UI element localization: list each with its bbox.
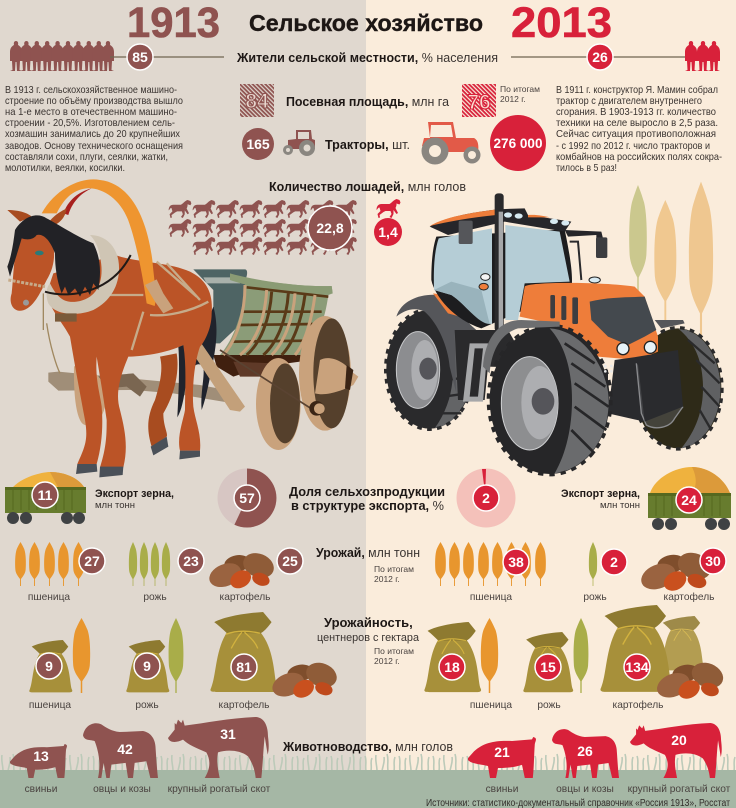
grain export 1913 xyxy=(5,472,174,524)
badge 22,8: 22,8 xyxy=(316,220,344,236)
badge 24: 24 xyxy=(681,492,697,508)
text 1913 xyxy=(5,84,183,174)
right background 2013 xyxy=(366,0,736,808)
rural population row xyxy=(10,41,720,71)
badge 30: 30 xyxy=(705,553,721,569)
people 1913 xyxy=(10,41,114,71)
far hind leg xyxy=(148,353,178,447)
badge 276 000 xyxy=(490,115,546,171)
cow: 31 xyxy=(220,726,236,742)
badge 23 xyxy=(178,548,204,574)
illustration: horse and cart xyxy=(7,179,358,477)
labels: рожь xyxy=(583,592,607,603)
hatched 76: 76 xyxy=(467,91,491,114)
text 1913: хозмашин занимались до 20 крупнейших xyxy=(5,128,181,140)
hatched 76 xyxy=(462,84,496,117)
rye xyxy=(589,542,597,586)
badge 85 xyxy=(127,44,153,70)
badge 38 xyxy=(503,549,529,575)
badge 11 xyxy=(32,482,58,508)
badge 2 xyxy=(601,549,627,575)
duga arc xyxy=(42,179,156,306)
hood xyxy=(520,283,658,360)
livestock 1913 xyxy=(10,717,271,795)
label xyxy=(561,488,640,511)
note 2012 xyxy=(500,84,540,104)
livestock heading: Животноводство, млн голов xyxy=(282,739,453,754)
left background 1913 xyxy=(0,0,366,808)
sheep: 26 xyxy=(577,743,593,759)
text 2013: трактор с двигателем внутреннего xyxy=(556,95,702,107)
pig: 13 xyxy=(33,748,49,764)
cow xyxy=(630,723,722,778)
yield heading: По итогам xyxy=(374,646,414,656)
tractors row xyxy=(242,115,546,171)
badge 25 xyxy=(277,548,303,574)
text 2013: - с 1992 по 2012 г. число тракторов и xyxy=(556,140,710,152)
cart xyxy=(48,269,358,450)
hatched 84 xyxy=(240,84,274,117)
badge 23: 23 xyxy=(183,553,199,569)
yield 2013 xyxy=(424,605,727,711)
label xyxy=(95,488,174,511)
labels: рожь xyxy=(537,700,561,711)
labels: пшеница xyxy=(470,592,512,603)
text 2013: техники на селе выросло в 2,5 раза. xyxy=(556,117,718,129)
labels xyxy=(29,699,269,711)
labels: картофель xyxy=(219,699,269,711)
shaft xyxy=(147,283,245,412)
export share pie 2013 xyxy=(456,468,516,528)
wagon xyxy=(5,472,86,524)
label: млн тонн xyxy=(95,500,135,511)
people 2013 xyxy=(685,41,720,71)
badge 27 xyxy=(79,548,105,574)
export share pie 1913 xyxy=(218,468,276,528)
title: Сельское хозяйство xyxy=(249,10,483,36)
note 2012: По итогам xyxy=(500,84,540,94)
labels: крупный рогатый скот xyxy=(628,784,731,795)
wheat bag 18 xyxy=(424,618,498,693)
export share heading: в структуре экспорта, % xyxy=(291,498,444,513)
lights grille xyxy=(604,365,613,373)
labels: пшеница xyxy=(29,700,71,711)
potato bag 81 xyxy=(210,612,340,701)
front bumper xyxy=(608,350,683,422)
potato bags 134: 134 xyxy=(625,659,649,675)
labels xyxy=(470,699,663,711)
horse body xyxy=(47,255,212,467)
livestock 2013 xyxy=(468,723,731,795)
rear fender xyxy=(396,295,476,393)
pig: 21 xyxy=(494,744,510,760)
labels xyxy=(28,591,270,603)
potatoes xyxy=(637,548,715,595)
text 2013 xyxy=(556,84,722,174)
small tractor 1913 xyxy=(283,130,315,156)
text 1913: строение по объёму производства вышло xyxy=(5,95,183,107)
hooves xyxy=(76,437,200,477)
text 1913: строении - 20,5%. Изготовлением сель- xyxy=(5,117,175,129)
labels xyxy=(486,784,731,795)
red tractor 2013 xyxy=(422,122,480,164)
harvest 2013 xyxy=(435,542,726,603)
badge 24 xyxy=(676,487,702,513)
rye bag 9: 9 xyxy=(143,658,151,674)
text 1913: на 1-е место в отечественном машино- xyxy=(5,106,177,118)
illustration: tractor xyxy=(386,193,722,475)
labels: свиньи xyxy=(486,784,518,795)
wheat xyxy=(435,542,546,586)
text 1913: молотилки, веялки, косилки. xyxy=(5,162,125,174)
cabin xyxy=(430,193,607,332)
heading sown area: Посевная площадь, млн га xyxy=(286,94,450,109)
rear tire xyxy=(386,309,474,429)
label: млн тонн xyxy=(600,500,640,511)
badge 57: 57 xyxy=(239,490,255,506)
badge 26 xyxy=(587,44,613,70)
text 1913: заводов. Основу технического оснащения xyxy=(5,140,183,152)
badge 2: 2 xyxy=(610,554,618,570)
harvest heading: 2012 г. xyxy=(374,574,400,584)
mane xyxy=(7,215,100,297)
text 2013: сгорания. В 1903-1913 гг. количество xyxy=(556,106,716,118)
front tire xyxy=(488,325,611,475)
potatoes xyxy=(206,549,278,592)
labels: овцы и козы xyxy=(93,784,151,795)
labels: рожь xyxy=(143,592,167,603)
heading tractors: Тракторы, шт. xyxy=(325,137,410,152)
yield heading: Урожайность, xyxy=(324,615,413,630)
horse count 2013 xyxy=(374,199,402,246)
text 2013: тилось в 5 раз! xyxy=(556,162,617,174)
horses heading: Количество лошадей, млн голов xyxy=(269,179,466,194)
sown area row xyxy=(240,84,540,117)
rye bag 9 xyxy=(126,618,183,693)
hatched 84: 84 xyxy=(245,90,269,113)
harvest heading: Урожай, млн тонн xyxy=(316,545,420,560)
text 1913: В 1913 г. сельскохозяйственное машино- xyxy=(5,84,177,96)
grass strip xyxy=(0,753,736,808)
sheep: 42 xyxy=(117,741,133,757)
year 1913: 1913 xyxy=(127,0,220,47)
year 2013: 2013 xyxy=(511,0,612,47)
badge 30 xyxy=(700,548,726,574)
rye xyxy=(129,542,170,586)
pig xyxy=(468,737,536,778)
cow xyxy=(168,717,269,778)
labels xyxy=(470,591,714,603)
potato bags 134 xyxy=(600,605,727,702)
yield heading xyxy=(317,615,420,666)
wheat xyxy=(15,542,84,586)
labels: рожь xyxy=(135,700,159,711)
badge 2: 2 xyxy=(482,490,490,506)
labels: картофель xyxy=(220,591,270,603)
labels xyxy=(25,784,271,795)
label: Экспорт зерна, xyxy=(561,488,640,500)
yield heading: 2012 г. xyxy=(374,656,400,666)
badge 276 000: 276 000 xyxy=(494,135,543,151)
horse count 1913 xyxy=(169,200,357,255)
front fender xyxy=(483,320,560,373)
yield 1913 xyxy=(29,612,340,711)
labels: пшеница xyxy=(28,592,70,603)
heading rural: Жители сельской местности, % населения xyxy=(236,50,498,65)
potato bag 81: 81 xyxy=(236,659,252,675)
reins xyxy=(45,255,131,294)
yield heading: центнеров с гектара xyxy=(317,632,420,644)
chassis xyxy=(455,330,608,417)
tail xyxy=(177,307,216,417)
note 2012: 2012 г. xyxy=(500,94,526,104)
badge 165: 165 xyxy=(246,136,270,152)
rye bag 15: 15 xyxy=(540,659,556,675)
harvest heading xyxy=(316,545,420,584)
head xyxy=(11,230,54,311)
labels: картофель xyxy=(613,699,663,711)
labels: картофель xyxy=(664,591,714,603)
labels: свиньи xyxy=(25,784,57,795)
badge 1,4: 1,4 xyxy=(378,224,398,240)
export share heading: Доля сельхозпродукции xyxy=(289,484,445,499)
wheat bag 18: 18 xyxy=(444,659,460,675)
sheep xyxy=(83,723,158,778)
far tire xyxy=(634,320,722,449)
harness xyxy=(110,262,208,350)
labels: пшеница xyxy=(470,700,512,711)
harvest heading: По итогам xyxy=(374,564,414,574)
wheat bag 9 xyxy=(29,618,90,693)
pig xyxy=(10,744,67,778)
sheep xyxy=(552,729,619,778)
wagon xyxy=(648,467,731,530)
badge 11: 11 xyxy=(38,487,53,503)
badge 165 xyxy=(242,128,274,160)
labels: крупный рогатый скот xyxy=(168,784,271,795)
illustration: wheat stalks xyxy=(629,182,713,338)
badge 26: 26 xyxy=(592,49,608,65)
harvest 1913 xyxy=(15,542,303,603)
text 2013: Сейчас ситуация противоположная xyxy=(556,128,716,140)
rye bag 15 xyxy=(523,618,588,693)
badge 25: 25 xyxy=(282,553,298,569)
badge 38: 38 xyxy=(508,554,524,570)
text 1913: составляли сохи, плуги, сеялки, жатки, xyxy=(5,151,168,163)
grain export 2013 xyxy=(561,467,731,530)
label: Экспорт зерна, xyxy=(95,488,174,500)
export share heading xyxy=(289,484,445,513)
badge 27: 27 xyxy=(84,553,100,569)
labels: овцы и козы xyxy=(556,784,614,795)
collar xyxy=(47,235,119,314)
wheat bag 9: 9 xyxy=(45,658,53,674)
badge 22,8 xyxy=(308,206,352,250)
badge 85: 85 xyxy=(132,49,148,65)
cow: 20 xyxy=(671,732,687,748)
